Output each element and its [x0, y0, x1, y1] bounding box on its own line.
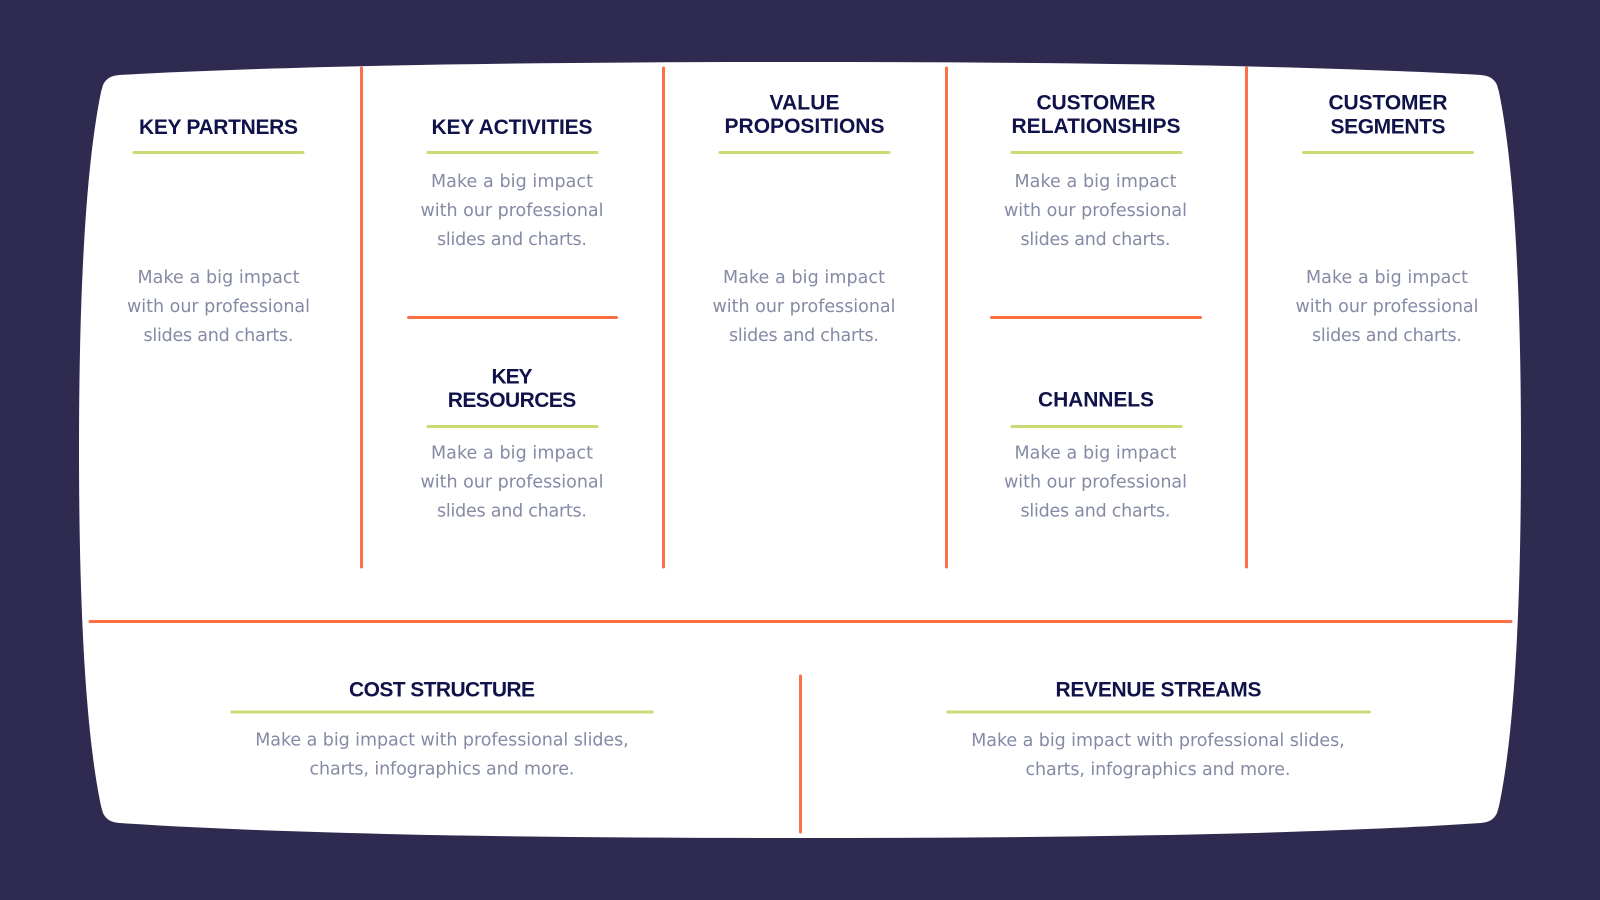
- text: cost structure body: Make a big impact with professional slides,: [255, 730, 629, 750]
- panel: key partners: [127, 116, 310, 346]
- text: key resources body: slides and charts.: [437, 502, 587, 522]
- panel: customer segments: [1296, 92, 1478, 346]
- text: channels body: with our professional: [1004, 472, 1187, 492]
- text: customer segments body: with our professional: [1296, 297, 1478, 317]
- text: key activities body: [420, 172, 604, 250]
- text: key partners body: Make a big impact: [138, 268, 300, 288]
- panel: revenue streams: [948, 678, 1370, 780]
- panel: key activities: [420, 116, 604, 250]
- heading: customer segments: CUSTOMER: [1328, 92, 1448, 114]
- heading: key resources: [448, 366, 576, 412]
- heading: key resources: RESOURCES: [448, 389, 576, 412]
- text: cost structure body: [255, 730, 629, 780]
- heading: key resources: KEY: [492, 366, 532, 388]
- underline: key partners: [134, 151, 303, 154]
- underline: channels: [1012, 425, 1181, 428]
- heading: cost structure: COST STRUCTURE: [349, 678, 535, 702]
- text: customer relationships body: [1004, 172, 1187, 250]
- heading: value propositions: PROPOSITIONS: [724, 115, 884, 138]
- text: revenue streams body: charts, infographics and more.: [1026, 760, 1290, 780]
- text: value propositions body: [712, 268, 896, 346]
- text: customer segments body: Make a big impact: [1306, 268, 1468, 288]
- text: value propositions body: with our professional: [712, 297, 896, 317]
- heading: customer relationships: CUSTOMER: [1036, 92, 1156, 114]
- heading: customer segments: [1328, 92, 1448, 138]
- text: cost structure body: charts, infographics and more.: [310, 760, 574, 780]
- text: key partners body: with our professional: [127, 297, 310, 317]
- text: customer segments body: slides and charts.: [1312, 326, 1462, 346]
- panel: channels: [1004, 388, 1187, 522]
- text: key activities body: slides and charts.: [437, 230, 587, 250]
- text: customer segments body: [1296, 268, 1478, 346]
- text: revenue streams body: Make a big impact with professional slides,: [971, 731, 1345, 751]
- heading: customer segments: SEGMENTS: [1330, 116, 1446, 138]
- text: key resources body: Make a big impact: [431, 444, 593, 464]
- text: customer relationships body: with our professional: [1004, 201, 1187, 221]
- heading: customer relationships: RELATIONSHIPS: [1012, 115, 1180, 138]
- text: key partners body: [127, 268, 310, 346]
- heading: customer relationships: [1012, 92, 1180, 138]
- heading: key activities: KEY ACTIVITIES: [432, 116, 592, 139]
- text: revenue streams body: [971, 731, 1345, 780]
- heading: value propositions: [724, 92, 884, 138]
- text: channels body: [1004, 444, 1187, 522]
- text: key activities body: Make a big impact: [431, 172, 593, 192]
- text: key resources body: [420, 444, 604, 522]
- text: customer relationships body: slides and charts.: [1020, 230, 1170, 250]
- heading: key partners: KEY PARTNERS: [139, 116, 298, 139]
- heading: channels: CHANNELS: [1038, 388, 1154, 412]
- text: key resources body: with our professional: [420, 472, 604, 492]
- text: key partners body: slides and charts.: [144, 326, 294, 346]
- text: value propositions body: Make a big impact: [723, 268, 885, 288]
- underline: customer relationships: [1012, 151, 1181, 154]
- underline: customer segments: [1304, 151, 1472, 154]
- text: key activities body: with our professional: [420, 201, 604, 221]
- underline: value propositions: [720, 151, 889, 154]
- underline: revenue streams: [948, 710, 1370, 714]
- heading: value propositions: VALUE: [770, 92, 840, 114]
- column divider lines: [90, 68, 1511, 832]
- text: customer relationships body: Make a big impact: [1014, 172, 1177, 192]
- underline: key resources: [428, 425, 597, 428]
- underline: cost structure: [232, 710, 652, 714]
- panel: customer relationships: [1004, 92, 1187, 250]
- panel: key resources: [420, 366, 604, 522]
- panel: white bulged card: [79, 62, 1521, 838]
- panel: value propositions: [712, 92, 896, 346]
- heading: revenue streams: REVENUE STREAMS: [1056, 678, 1262, 702]
- text: channels body: slides and charts.: [1020, 502, 1170, 522]
- panel: cost structure: [232, 678, 652, 780]
- text: channels body: Make a big impact: [1014, 444, 1177, 464]
- text: value propositions body: slides and charts.: [729, 326, 879, 346]
- underline: key activities: [428, 151, 597, 154]
